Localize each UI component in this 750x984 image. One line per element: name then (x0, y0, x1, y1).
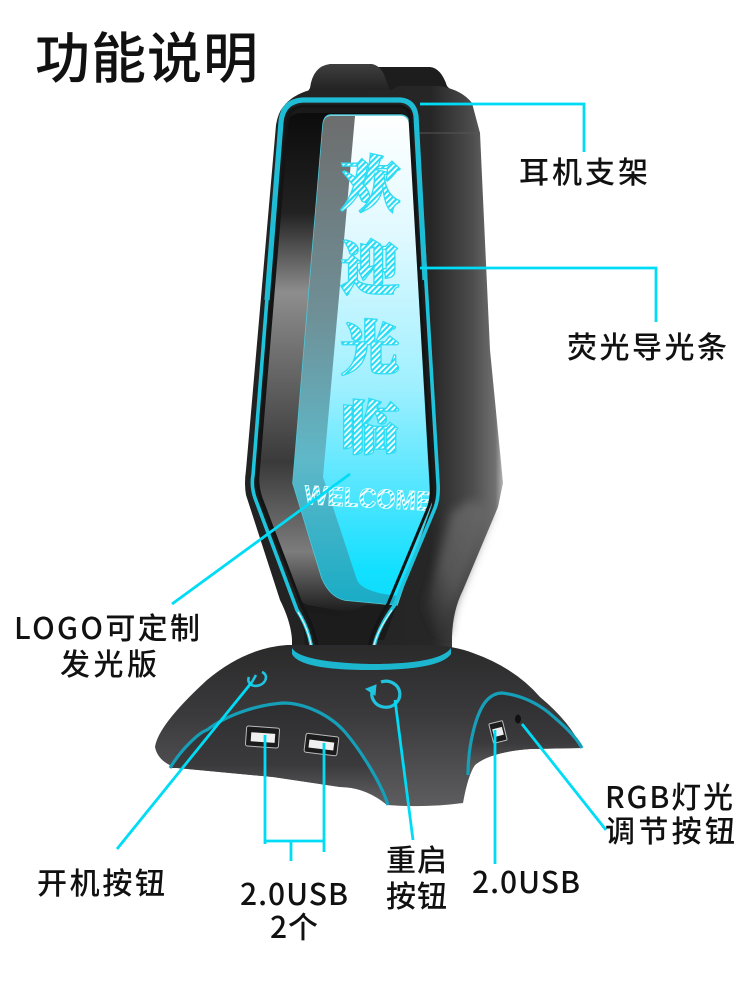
light strip dark edge (258, 106, 431, 652)
engraved text on panel (304, 138, 433, 517)
base shell (155, 645, 582, 806)
label: logo customizable: LOGO可定制 (14, 604, 200, 648)
line: RGB (522, 724, 606, 830)
panel shaded part (293, 116, 397, 605)
临: 临 (341, 382, 399, 466)
RGB button hole (515, 714, 521, 724)
lower body highlight (426, 500, 492, 635)
label: headset holder: 耳机支架 (519, 148, 648, 192)
right recess (468, 693, 582, 775)
right recess cyan edge (468, 693, 582, 775)
label: reset button: 按钮 (386, 872, 447, 916)
line: headset holder (420, 104, 584, 152)
left recess (170, 703, 388, 805)
left USB port 1 (245, 726, 280, 748)
label: RGB button: 调节按钮 (605, 807, 735, 851)
window recess (251, 107, 436, 640)
光: 光 (341, 302, 399, 386)
line: logo (172, 474, 350, 604)
label: RGB button (605, 773, 735, 851)
upper body seam (418, 132, 480, 134)
label: logo customizable (14, 604, 200, 684)
title: 功能说明 (35, 14, 258, 94)
window inner dark gradient (257, 113, 431, 612)
label: power button: 开机按钮 (37, 859, 165, 903)
neck collar (292, 648, 451, 670)
left USB port 2 (304, 733, 339, 756)
label: light strip: 荧光导光条 (567, 323, 727, 367)
right USB port (489, 721, 507, 743)
WELCOME: WELCOME (304, 480, 433, 517)
label: right USB: 2.0USB (472, 858, 580, 902)
欢: 欢 (340, 138, 400, 224)
label: RGB button: RGB灯光 (605, 773, 733, 817)
label: logo customizable: 发光版 (60, 640, 157, 684)
迎: 迎 (341, 222, 399, 306)
callout lines (117, 104, 656, 864)
label: reset button: 重启 (386, 836, 447, 880)
neck block (302, 605, 392, 650)
light strip upper thick section (267, 100, 425, 300)
line: right USB (494, 730, 496, 864)
stand rear headset cap (375, 67, 460, 100)
line: reset (395, 700, 413, 840)
product: base (155, 645, 582, 806)
glowing panel (293, 115, 431, 605)
label: USB pair: 2.0USB (240, 870, 348, 914)
line: light strip (420, 268, 656, 322)
line: USB pair bracket (265, 735, 324, 861)
label: USB pair (240, 870, 348, 947)
light strip (252, 100, 438, 652)
left recess cyan edge (170, 703, 388, 805)
light strip highlight (298, 610, 392, 650)
stand front headset cap (305, 64, 392, 96)
label: USB pair: 2个 (270, 903, 318, 947)
line: power button (117, 682, 252, 849)
label: reset button (386, 836, 447, 916)
stand body (245, 86, 503, 652)
product: headset stand (245, 64, 503, 652)
icon: restart (366, 681, 400, 707)
icon: power (248, 672, 266, 686)
